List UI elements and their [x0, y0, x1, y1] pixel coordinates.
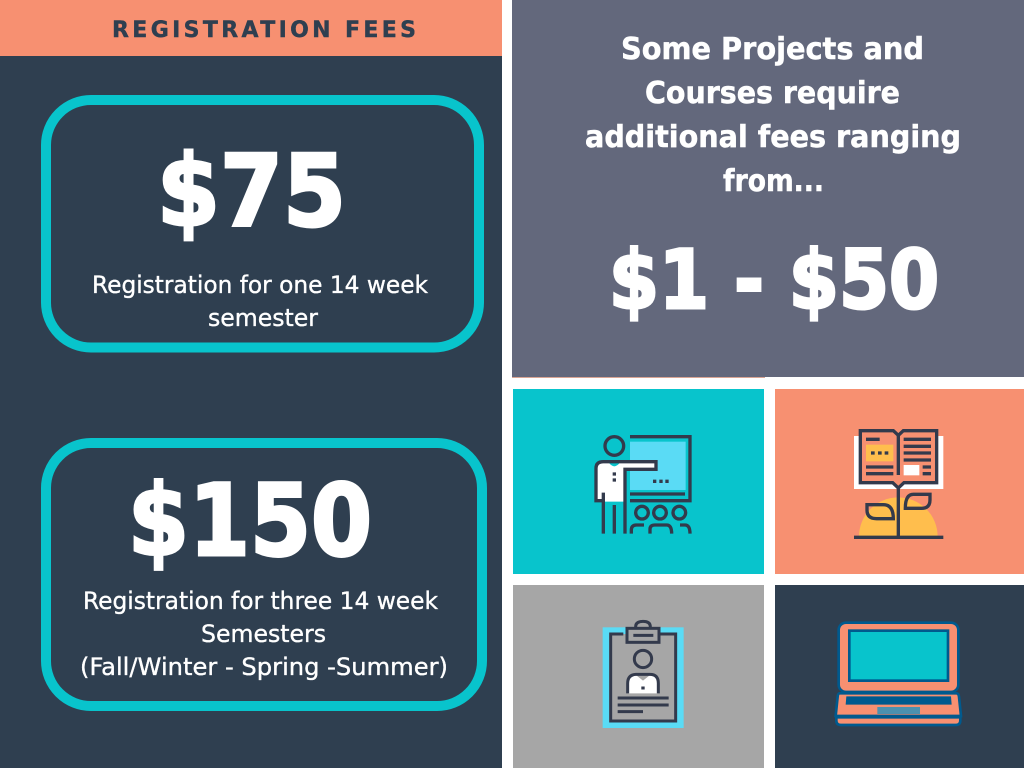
icon: open book plant [854, 431, 943, 537]
panel: additional fees: Some Projects and [621, 32, 924, 67]
panel: registration fees [0, 0, 502, 768]
card: $75 one semester: $75 [157, 134, 346, 250]
panel: additional fees [512, 0, 1024, 378]
tile: book [775, 389, 1024, 574]
panel: additional fees: additional fees ranging [585, 120, 961, 155]
tile: laptop [775, 585, 1024, 768]
card: $150 three semesters: $150 [128, 464, 372, 579]
tile: clipboard [513, 585, 764, 768]
card: $75 one semester: Registration for one 14 week [92, 271, 428, 299]
icon: clipboard profile [603, 621, 684, 728]
card: $75 one semester [46, 100, 479, 348]
icon: teacher at board [596, 437, 690, 534]
tile: teacher [513, 389, 764, 574]
card: $75 one semester: semester [208, 304, 318, 332]
icon: laptop [836, 623, 961, 725]
heading: registration fees: REGISTRATION FEES [112, 18, 416, 43]
card: $150 three semesters [46, 443, 482, 706]
panel: additional fees: $1 - $50 [609, 234, 939, 328]
card: $150 three semesters: (Fall/Winter - Spring -Summer) [80, 653, 448, 681]
panel: additional fees: from... [723, 164, 824, 199]
card: $150 three semesters: Semesters [201, 620, 326, 648]
heading: registration fees [0, 0, 502, 56]
panel: additional fees: Courses require [645, 76, 900, 111]
card: $150 three semesters: Registration for three 14 week [83, 587, 438, 615]
